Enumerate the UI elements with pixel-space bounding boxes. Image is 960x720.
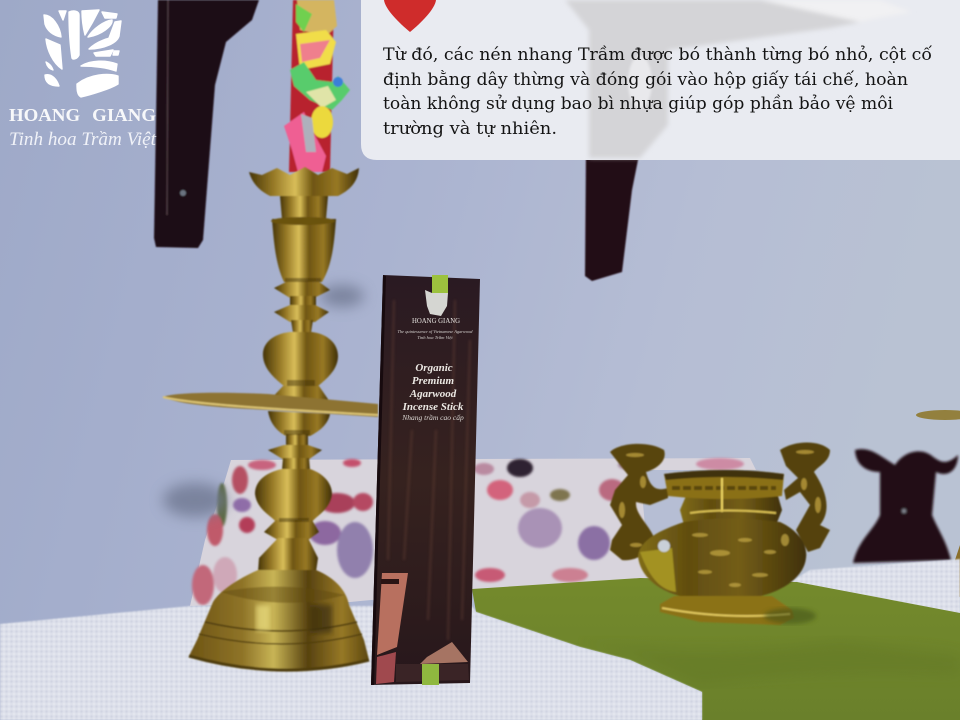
box subtitle: Nhang trầm cao cấp — [401, 413, 464, 422]
candlestick tray — [163, 393, 378, 417]
white lace tablecloth right — [790, 559, 960, 614]
box artwork: red door — [377, 573, 408, 655]
body text — [383, 45, 933, 139]
logo tagline: Tinh hoa Trầm Việt — [9, 129, 157, 150]
candlestick lotus cup — [249, 167, 359, 196]
candlestick wall shadows — [163, 285, 364, 517]
candlestick bell base — [189, 570, 369, 670]
box title — [402, 362, 464, 413]
burner left dragon handle — [610, 444, 668, 560]
logo wordmark: HOANG GIANG — [9, 105, 156, 125]
box green bottom tag — [422, 664, 439, 685]
burner right dragon handle — [780, 442, 830, 552]
icon: red heart — [384, 0, 436, 32]
burner neck — [680, 496, 782, 525]
runner fold shading — [580, 640, 960, 685]
green table runner — [472, 578, 960, 720]
right candlestick fragment — [916, 410, 960, 597]
box green top tag — [432, 275, 448, 293]
logo — [9, 10, 157, 150]
box small logo — [425, 290, 448, 316]
burner body — [638, 518, 806, 598]
body text: Từ đó, các nén nhang Trầm được bó thành từng bó nhỏ, cột cố — [383, 45, 933, 65]
logo tree icon — [44, 10, 121, 97]
box tagline: The quintessence of Vietnamese Agarwood — [398, 329, 473, 334]
panel background — [361, 0, 960, 160]
body text: trường và tự nhiên. — [383, 119, 557, 139]
dark vase — [853, 449, 958, 563]
box tagline vietnamese: Tinh hoa Trầm Việt — [417, 335, 453, 340]
floral fabric backdrop — [190, 458, 756, 606]
candlestick dark bands — [279, 278, 321, 522]
text panel — [361, 0, 960, 160]
box title: Incense Stick — [402, 401, 464, 413]
wall shelf bracket right — [585, 150, 640, 281]
body text: định bằng dây thừng và đóng gói vào hộp giấy tái chế, hoàn — [383, 70, 908, 90]
white lace tablecloth left — [0, 606, 702, 720]
panel ghost shelf opening — [628, 56, 652, 108]
box brand name: HOANG GIANG — [412, 317, 460, 325]
panel ghosted shelf — [565, 0, 912, 158]
brass dragon incense burner — [610, 442, 830, 625]
burner shadow on runner — [764, 608, 816, 624]
burner foot — [660, 596, 794, 625]
burner relief highlights — [692, 533, 789, 587]
box title: Premium — [412, 375, 455, 387]
box title: Agarwood — [409, 388, 457, 400]
brass candlestick — [163, 167, 378, 670]
box artwork: book — [376, 652, 396, 684]
decorated red candle — [284, 0, 350, 172]
incense product box — [371, 275, 480, 685]
wall shelf bracket left — [154, 0, 259, 248]
burner rim band — [664, 470, 784, 499]
body text: toàn không sử dụng bao bì nhựa giúp góp phần bảo vệ môi — [383, 94, 894, 114]
box title: Organic — [415, 362, 453, 374]
